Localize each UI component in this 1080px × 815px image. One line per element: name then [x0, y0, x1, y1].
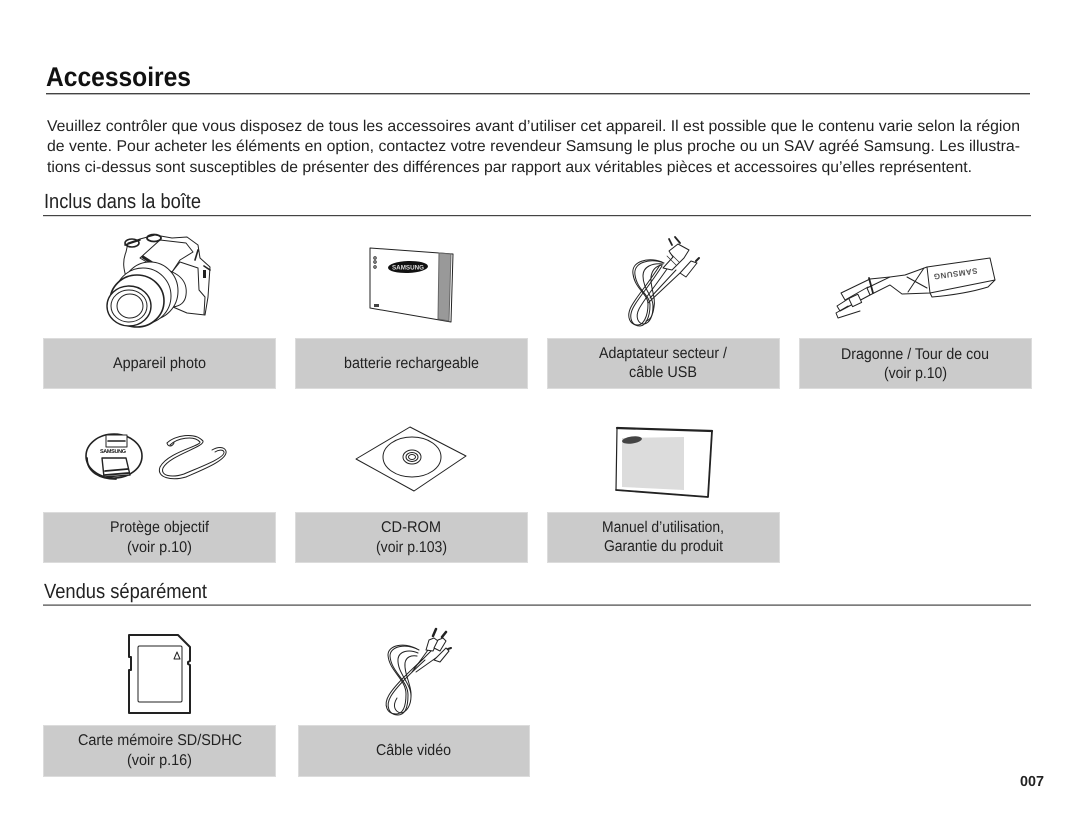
icon: user manual — [616, 428, 712, 497]
icon: battery — [370, 248, 453, 322]
icon: AC adapter and USB cable — [629, 237, 699, 326]
label: batterie rechargeable — [296, 338, 528, 388]
intro paragraph: de vente. Pour acheter les éléments en option, contactez votre revendeur Samsung le plus proche ou un SAV agréé Samsung. Les illustra- — [47, 138, 1020, 155]
icon: camera — [107, 234, 210, 327]
label: Câble vidéo — [298, 726, 530, 776]
icon: lens cap and cord: SAMSUNG — [100, 449, 126, 455]
label: Protège objectif — [44, 512, 276, 562]
label: Dragonne: Dragonne / Tour de cou — [841, 346, 989, 363]
icon: SD card — [129, 635, 190, 713]
intro paragraph — [47, 118, 1020, 176]
icon: wrist strap: SAMSUNG — [933, 266, 978, 281]
label: batterie rechargeable: batterie rechargeable — [344, 355, 479, 372]
label: Manuel: Garantie du produit — [604, 538, 724, 555]
label: Dragonne: (voir p.10) — [884, 365, 947, 382]
heading: Inclus dans la boîte: Inclus dans la boîte — [44, 190, 201, 213]
icon: CD-ROM — [356, 427, 466, 491]
label: Adaptateur secteur: Adaptateur secteur / — [599, 345, 728, 362]
label: Carte mémoire: (voir p.16) — [127, 752, 192, 769]
label: Appareil photo: Appareil photo — [113, 355, 206, 372]
label: Adaptateur secteur: câble USB — [629, 364, 697, 381]
heading: Vendus séparément: Vendus séparément — [44, 580, 207, 603]
label: CD-ROM: (voir p.103) — [376, 539, 447, 556]
label: Dragonne — [800, 338, 1032, 388]
label: Carte mémoire: Carte mémoire SD/SDHC — [78, 732, 242, 749]
label: Manuel — [548, 512, 780, 562]
label: CD-ROM — [296, 512, 528, 562]
label: Câble vidéo: Câble vidéo — [376, 742, 451, 759]
icon: wrist strap — [836, 258, 995, 318]
title: Accessoires: Accessoires — [46, 62, 191, 92]
label: CD-ROM: CD-ROM — [381, 519, 441, 536]
icon: battery: SAMSUNG — [392, 264, 424, 272]
label: Adaptateur secteur — [548, 338, 780, 388]
intro paragraph: tions ci-dessus sont susceptibles de présenter des différences par rapport aux véritables pièces et accessoires qu’elles représentent. — [47, 159, 972, 176]
label: Protège objectif: (voir p.10) — [127, 539, 192, 556]
label: Manuel: Manuel d’utilisation, — [602, 519, 724, 536]
icon: lens cap and cord — [86, 434, 226, 479]
intro paragraph: Veuillez contrôler que vous disposez de tous les accessoires avant d’utiliser cet appareil. Il est possible que le contenu varie selon la région — [47, 118, 1020, 135]
label: Protège objectif: Protège objectif — [110, 519, 210, 536]
label: Appareil photo — [44, 338, 276, 388]
label: Carte mémoire — [44, 726, 276, 776]
page number: 007 — [1020, 774, 1044, 790]
icon: video cable — [386, 629, 451, 715]
